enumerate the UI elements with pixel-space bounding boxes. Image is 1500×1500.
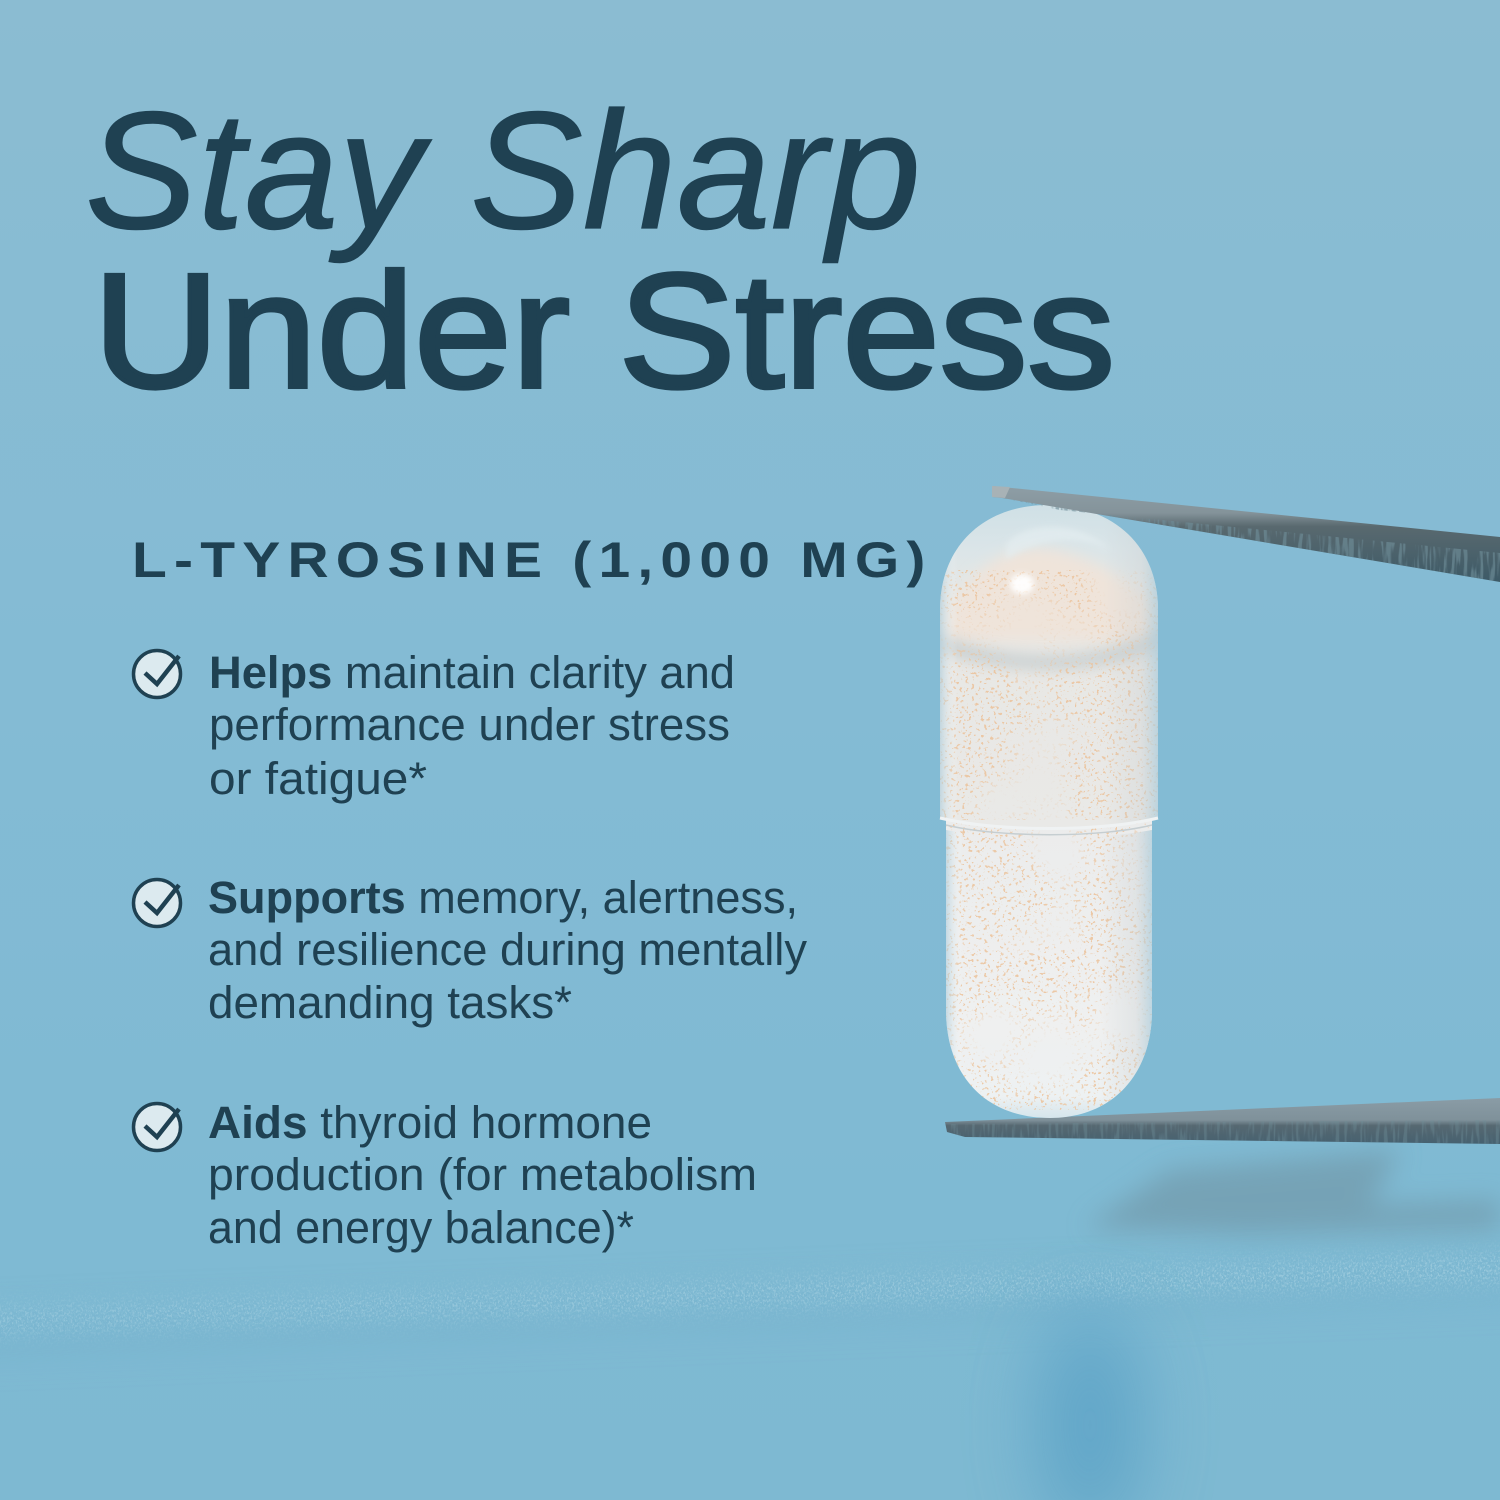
ingredient heading: L-TYROSINE (1,000 MG) (132, 532, 925, 588)
capsule seam (940, 818, 1158, 828)
text: helps (209, 647, 735, 804)
tweezer shadow (1085, 1150, 1500, 1234)
blurred reflection on the surface (1042, 1310, 1138, 1500)
text: aids: Aids thyroid hormone (208, 1097, 652, 1148)
icon: check 3 (134, 1104, 180, 1150)
text: aids: and energy balance)* (208, 1202, 634, 1253)
capsule translucent edges (940, 505, 1158, 828)
icon: check 1 (134, 650, 180, 698)
grey shell overlap band (936, 628, 1162, 669)
text: supports: demanding tasks* (208, 977, 572, 1028)
text: supports: Supports memory, alertness, (208, 872, 798, 923)
capsule lower body (946, 815, 1152, 1118)
text: supports (208, 872, 808, 1028)
text: supports: and resilience during mentally (208, 924, 808, 975)
text: aids: production (for metabolism (208, 1149, 757, 1200)
text: helps: or fatigue* (209, 753, 427, 804)
capsule glint (1010, 574, 1034, 594)
surface texture band (0, 1249, 1500, 1336)
capsule upper shell (940, 505, 1158, 828)
upper tweezer blade (990, 484, 1500, 584)
benefit 3 (134, 1097, 757, 1253)
icon: check 2 (134, 880, 180, 926)
benefit 1 (134, 647, 735, 804)
title: Under Stress (93, 239, 1115, 422)
powder mound in the dome (954, 547, 1132, 634)
text: aids (208, 1097, 757, 1253)
capsule (936, 505, 1162, 1118)
lower tweezer blade (945, 1098, 1500, 1144)
text: helps: Helps maintain clarity and (209, 647, 735, 698)
title: Stay Sharp (85, 78, 921, 264)
title (85, 78, 1115, 422)
text: helps: performance under stress (209, 699, 730, 750)
benefit 2 (134, 872, 808, 1028)
translucent dome highlight (1006, 527, 1110, 560)
powder specks (940, 570, 1158, 1110)
